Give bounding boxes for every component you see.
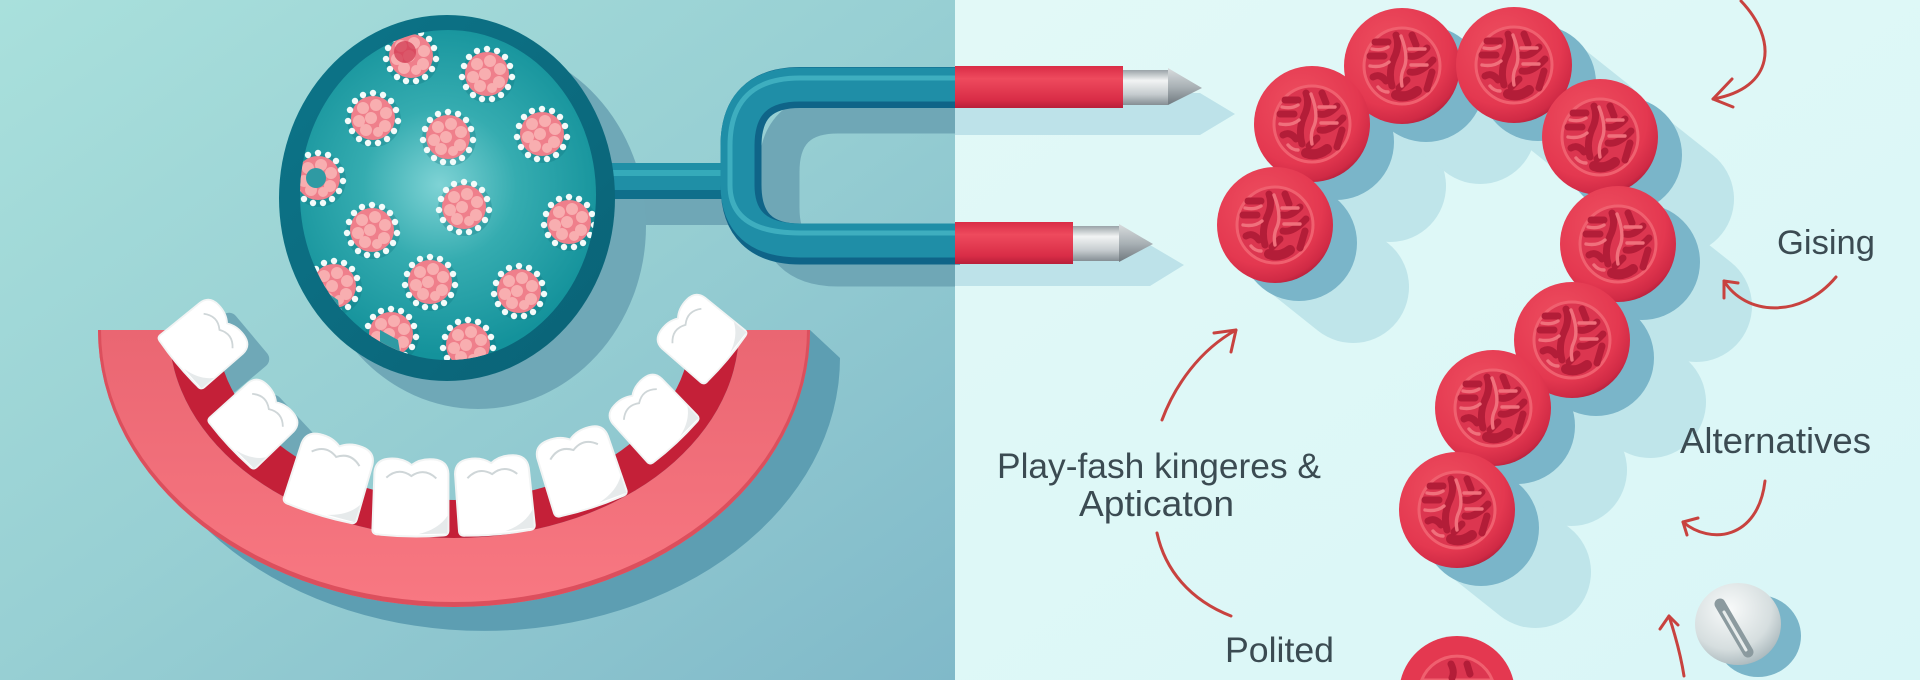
handle stem xyxy=(610,163,735,199)
label: Play-fash kingeres & Apticaton: Play-fash kingeres & xyxy=(997,447,1321,486)
right panel background xyxy=(955,0,1920,680)
arrow: below Alternatives xyxy=(1683,481,1765,535)
label: Alternatives: Alternatives xyxy=(1680,420,1871,461)
germs in lens xyxy=(290,28,597,374)
pill contact shadows xyxy=(1241,25,1700,586)
arrow: top right xyxy=(1713,1,1765,107)
label: Play-fash kingeres & Apticaton: Apticaton xyxy=(1079,483,1234,524)
pill long shadows xyxy=(1275,65,1696,572)
left panel background xyxy=(0,0,955,680)
label: Play-fash kingeres & Apticaton xyxy=(997,447,1321,524)
magnifier: lens with germs xyxy=(279,15,615,381)
label: Gising: Gising xyxy=(1777,224,1875,262)
teeth row xyxy=(156,289,749,538)
label: Polited: Polited xyxy=(1225,630,1334,670)
gum arch xyxy=(98,330,810,607)
dark gum line behind teeth xyxy=(169,330,739,538)
magnifier shadow xyxy=(310,43,646,409)
partial pill cut by the bottom edge xyxy=(1401,636,1513,680)
arrow: near Gising xyxy=(1724,277,1836,308)
arrow: curve below Apticaton xyxy=(1157,533,1231,616)
probe shadow xyxy=(610,93,1235,286)
upper probe tip: red sleeve and steel point xyxy=(955,66,1202,108)
lower probe tip: red sleeve and steel point xyxy=(955,222,1153,264)
arrow: bottom xyxy=(1660,616,1684,676)
dental probe fork xyxy=(730,78,960,244)
gum shadow xyxy=(98,330,840,631)
icon: silver pill xyxy=(1695,583,1801,677)
tooth shadows xyxy=(178,309,319,486)
red pills forming a question mark xyxy=(1217,7,1676,680)
arrow: up toward pills xyxy=(1162,330,1236,420)
